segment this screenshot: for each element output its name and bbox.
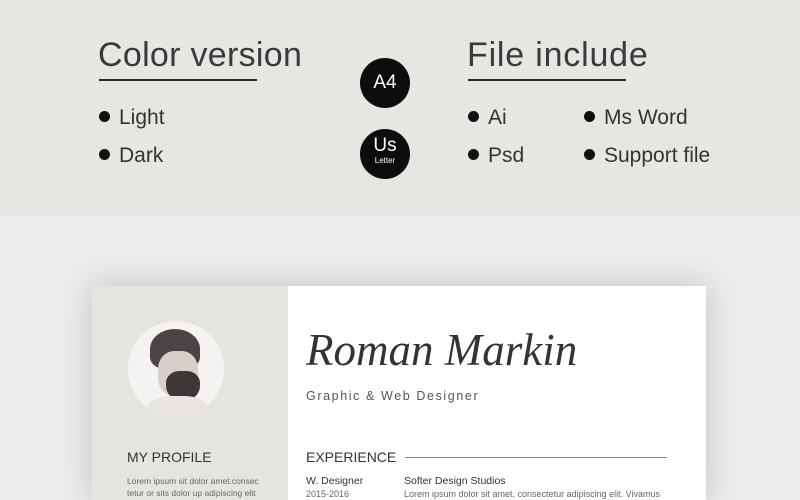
profile text: Lorem ipsum sit dolor amet.consec tetur or sits dolor up adipiscing elit xyxy=(127,476,259,498)
heading: color version: Color version xyxy=(98,36,302,74)
heading: my profile: MY PROFILE xyxy=(127,449,212,465)
heading: file include: File include xyxy=(467,36,649,74)
left sidebar xyxy=(92,286,288,500)
badge: A4 xyxy=(360,58,410,108)
list: files: Ms Word xyxy=(604,106,688,129)
badge: US letter xyxy=(360,129,410,179)
resume card xyxy=(92,286,706,500)
resume card: 2015-2016 xyxy=(306,489,349,499)
photo xyxy=(128,321,224,417)
list: colors: Dark xyxy=(119,144,163,167)
top band xyxy=(0,0,800,215)
job title: Graphic & Web Designer xyxy=(306,389,479,403)
badge: US letter: Us xyxy=(373,135,397,156)
list: files: Ai xyxy=(488,106,507,129)
experience entry xyxy=(306,475,660,499)
resume card: Lorem ipsum dolor sit amet, consectetur adipiscing elit. Vivamus xyxy=(404,489,660,499)
list: files: Psd xyxy=(488,144,524,167)
name: Roman Markin xyxy=(306,325,577,375)
list: colors xyxy=(99,106,165,167)
list: files: Support file xyxy=(604,144,710,167)
list: colors: Light xyxy=(119,106,165,129)
list: files xyxy=(468,106,710,167)
resume card: W. Designer xyxy=(306,475,363,487)
heading: experience: EXPERIENCE xyxy=(306,449,396,465)
badge: A4: A4 xyxy=(373,72,397,93)
resume card: Softer Design Studios xyxy=(404,475,506,487)
badge: US letter: Letter xyxy=(375,156,395,165)
